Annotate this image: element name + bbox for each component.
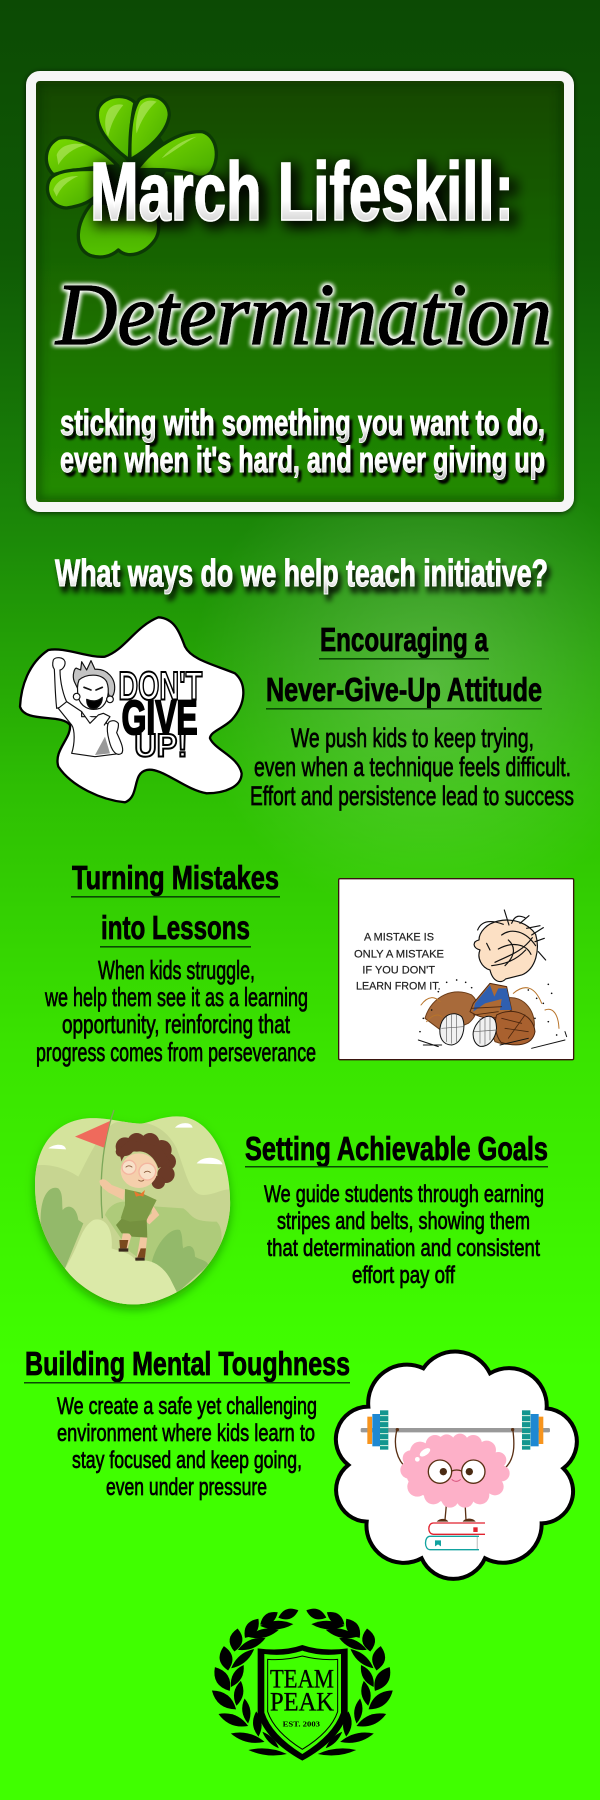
heading: encouraging: Encouraging a [320, 621, 488, 658]
title: Determination script: Determination [55, 267, 552, 364]
laurel wreath left [208, 1606, 300, 1757]
illustration: brain lifting weights [336, 1352, 577, 1579]
lettering: don't give up: UP! [134, 727, 188, 764]
card inner shadow [36, 81, 564, 502]
scout child [99, 1133, 176, 1261]
body text: stay focused and keep going, [72, 1447, 302, 1474]
heading: turning mistakes: into Lessons [101, 909, 250, 946]
blob shape [20, 617, 243, 802]
heading: mental toughness: Building Mental Toughness [25, 1345, 350, 1382]
body text: effort pay off [352, 1262, 455, 1289]
thought cloud [336, 1352, 577, 1579]
shield [258, 1645, 348, 1761]
cartoon boy in dirt [418, 910, 567, 1048]
quote text: IF YOU DON'T [362, 964, 435, 976]
shield: TEAM [270, 1664, 334, 1694]
body text [57, 1393, 317, 1501]
quote text: LEARN FROM IT. [356, 980, 441, 992]
illustration: mistake quote card [339, 879, 574, 1060]
panel: title card [31, 76, 569, 507]
apple-shaped scene background [35, 1116, 230, 1304]
body text: We create a safe yet challenging [57, 1393, 317, 1420]
body text [36, 955, 316, 1067]
laurel wreath right [305, 1606, 396, 1757]
body text: we help them see it as a learning [44, 982, 308, 1012]
panel: turning mistakes [36, 859, 574, 1067]
body text: environment where kids learn to [57, 1420, 315, 1447]
body text: When kids struggle, [98, 955, 255, 985]
panel: achievable goals [30, 1110, 548, 1312]
body text: opportunity, reinforcing that [62, 1009, 291, 1039]
body text [264, 1181, 544, 1289]
brain character [395, 1428, 514, 1522]
lettering: don't give up: GIVE [122, 691, 198, 745]
logo: Team Peak crest [208, 1606, 396, 1761]
body text: progress comes from perseverance [36, 1037, 316, 1067]
heading: encouraging [266, 621, 542, 710]
icon: shamrock [46, 96, 216, 257]
shamrock highlights [53, 101, 197, 197]
shield: PEAK [270, 1686, 334, 1716]
flag [75, 1110, 114, 1218]
shield: EST. 2003 [283, 1720, 320, 1729]
lettering: don't give up: DON'T [118, 664, 202, 708]
lettering: don't give up [118, 664, 202, 764]
stacked books [425, 1523, 485, 1550]
card [339, 879, 574, 1060]
heading: turning mistakes [71, 859, 280, 948]
body text [250, 723, 574, 811]
cartoon boy [53, 658, 123, 757]
illustration: don't give up blob [20, 617, 243, 802]
panel: encouraging attitude [20, 617, 574, 811]
body text: even under pressure [106, 1474, 267, 1501]
definition text [60, 402, 545, 480]
barbell [361, 1410, 550, 1450]
illustration: child climbing with flag [30, 1110, 237, 1312]
panel: mental toughness [24, 1345, 577, 1579]
quote text [354, 932, 444, 992]
quote text: ONLY A MISTAKE [354, 948, 444, 960]
quote text: A MISTAKE IS [364, 932, 434, 944]
heading: turning mistakes: Turning Mistakes [72, 859, 279, 896]
card frame [31, 76, 569, 507]
